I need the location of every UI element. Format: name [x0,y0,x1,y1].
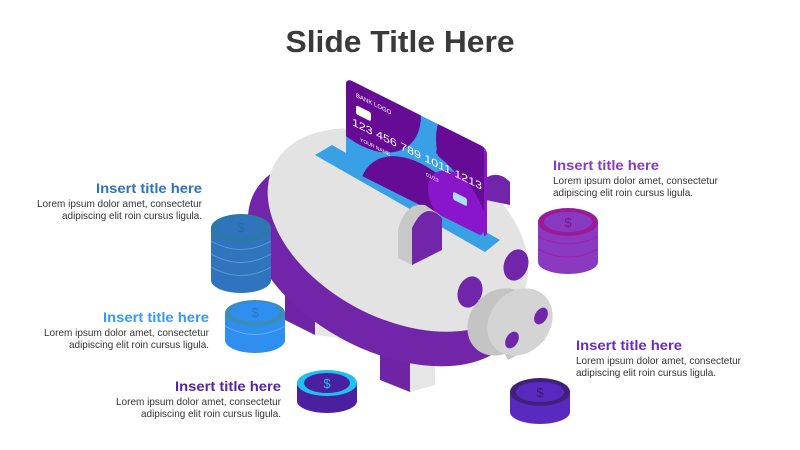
text block 3: Lorem ipsum dolor amet, consectetur [116,396,281,408]
coin stack 1 (blue, tall) [211,214,271,293]
coin 3 (cyan/dark): $ [323,376,331,391]
piggy bank [248,80,553,392]
text block 3: adipiscing elit roin cursus ligula. [141,408,281,420]
text block 1 [37,180,202,222]
coin slot [315,145,500,252]
credit card: YOUR NAME [360,137,391,158]
credit card: BANK LOGO [356,92,391,117]
coin 5 (dark purple) [510,378,570,424]
coin stack 4 (purple) [538,208,598,274]
body lower purple [213,115,557,409]
text block 1: Lorem ipsum dolor amet, consectetur [37,198,202,210]
eyes [453,273,487,311]
text block 5: Lorem ipsum dolor amet, consectetur [576,355,741,367]
text block 1: adipiscing elit roin cursus ligula. [62,210,202,222]
text block 5: adipiscing elit roin cursus ligula. [576,367,716,379]
credit card: 01/23 [426,172,439,184]
coin stack 2 (light blue) [225,300,285,353]
text block 4: Insert title here [553,157,659,173]
body top gray [233,87,563,373]
back ear [486,175,510,205]
text block 2: Lorem ipsum dolor amet, consectetur [44,327,209,339]
text block 5: Insert title here [576,337,682,353]
text block 2 [44,309,209,351]
coin 5 (dark purple): $ [536,385,544,400]
text block 3: Insert title here [175,378,281,394]
leg back left [285,290,340,338]
title: Slide Title Here [286,24,514,59]
front ear [398,205,442,265]
text block 4: Lorem ipsum dolor amet, consectetur [553,175,718,187]
snout [454,275,566,369]
text block 4 [553,157,718,199]
text block 5 [576,337,741,379]
text block 3 [116,378,281,420]
credit card [346,80,487,236]
leg front [380,340,435,392]
text block 2: adipiscing elit roin cursus ligula. [69,339,209,351]
text block 4: adipiscing elit roin cursus ligula. [553,187,693,199]
credit card: 123 456 789 1011 1213 [352,117,482,193]
coin stack 2 (light blue): $ [251,305,259,320]
coin stack 4 (purple): $ [564,215,572,230]
coin 3 (cyan/dark) [297,370,357,413]
text block 2: Insert title here [103,309,209,325]
coin stack 1 (blue, tall): $ [237,220,245,235]
text block 1: Insert title here [96,180,202,196]
